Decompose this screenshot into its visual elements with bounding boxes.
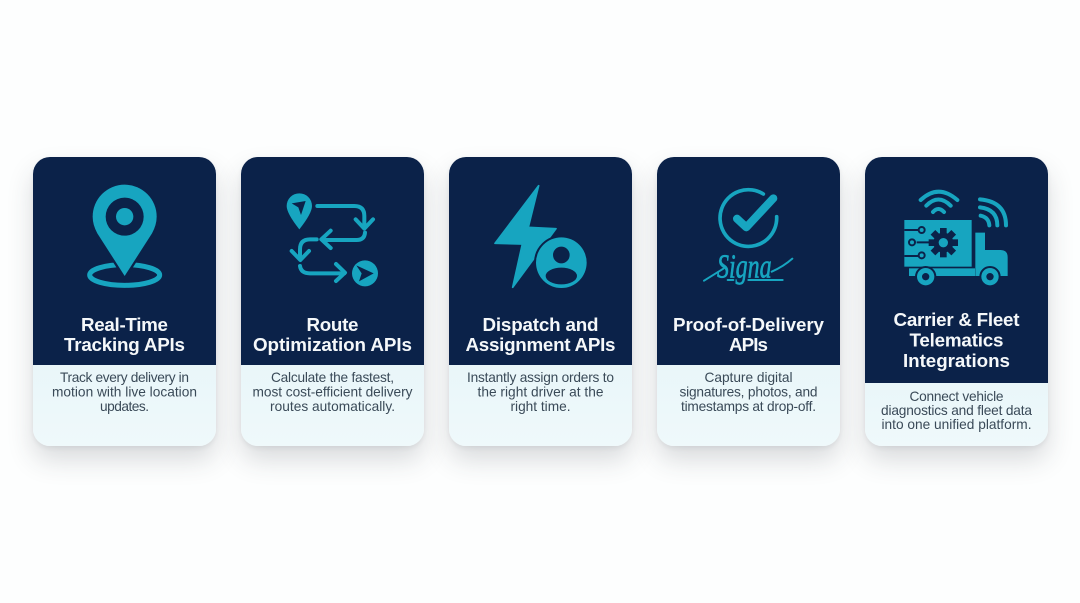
description xyxy=(467,370,614,414)
description: Capture digital xyxy=(704,370,792,385)
panel: carrier and fleet telematics xyxy=(865,157,1048,446)
heading: Tracking APIs xyxy=(64,334,185,355)
icon: location pin xyxy=(87,184,162,288)
heading xyxy=(466,314,616,355)
description: Track every delivery in xyxy=(60,370,189,385)
description: diagnostics and fleet data xyxy=(881,403,1032,418)
panel: real-time tracking xyxy=(33,157,216,446)
description: right time. xyxy=(510,399,570,414)
icon: route arrows xyxy=(286,193,378,286)
heading: APIs xyxy=(729,334,768,355)
heading: Carrier & Fleet xyxy=(894,309,1020,330)
heading xyxy=(253,314,412,355)
heading: Proof-of-Delivery xyxy=(673,314,825,335)
description: signatures, photos, and xyxy=(680,384,818,400)
heading: Dispatch and xyxy=(482,314,598,335)
icon: check and signature xyxy=(703,188,794,285)
description: into one unified platform. xyxy=(882,417,1032,432)
icon: check and signature: Signa xyxy=(717,249,772,285)
heading: Optimization APIs xyxy=(253,334,412,355)
heading: Route xyxy=(306,314,358,335)
heading xyxy=(673,314,825,355)
panel: dispatch and assignment xyxy=(449,157,632,446)
description: updates. xyxy=(100,399,149,414)
heading: Integrations xyxy=(903,350,1010,371)
heading: Real-Time xyxy=(81,314,168,335)
heading: Telematics xyxy=(910,330,1004,350)
description: most cost-efficient delivery xyxy=(252,384,413,400)
panel: route optimization xyxy=(241,157,424,446)
description: Connect vehicle xyxy=(910,389,1004,404)
heading: Assignment APIs xyxy=(466,334,616,355)
description: routes automatically. xyxy=(270,399,395,414)
description xyxy=(680,370,818,414)
heading xyxy=(64,314,185,355)
description: motion with live location xyxy=(52,384,197,400)
description: Calculate the fastest, xyxy=(271,370,394,385)
icon: connected truck xyxy=(904,190,1008,286)
heading xyxy=(894,309,1020,371)
description xyxy=(252,370,413,414)
description: the right driver at the xyxy=(478,384,604,400)
description: Instantly assign orders to xyxy=(467,370,614,385)
icon: lightning bolt with person xyxy=(494,184,587,288)
description xyxy=(881,389,1032,432)
description: timestamps at drop-off. xyxy=(681,399,816,414)
description xyxy=(52,370,197,414)
panel: proof of delivery xyxy=(657,157,840,446)
